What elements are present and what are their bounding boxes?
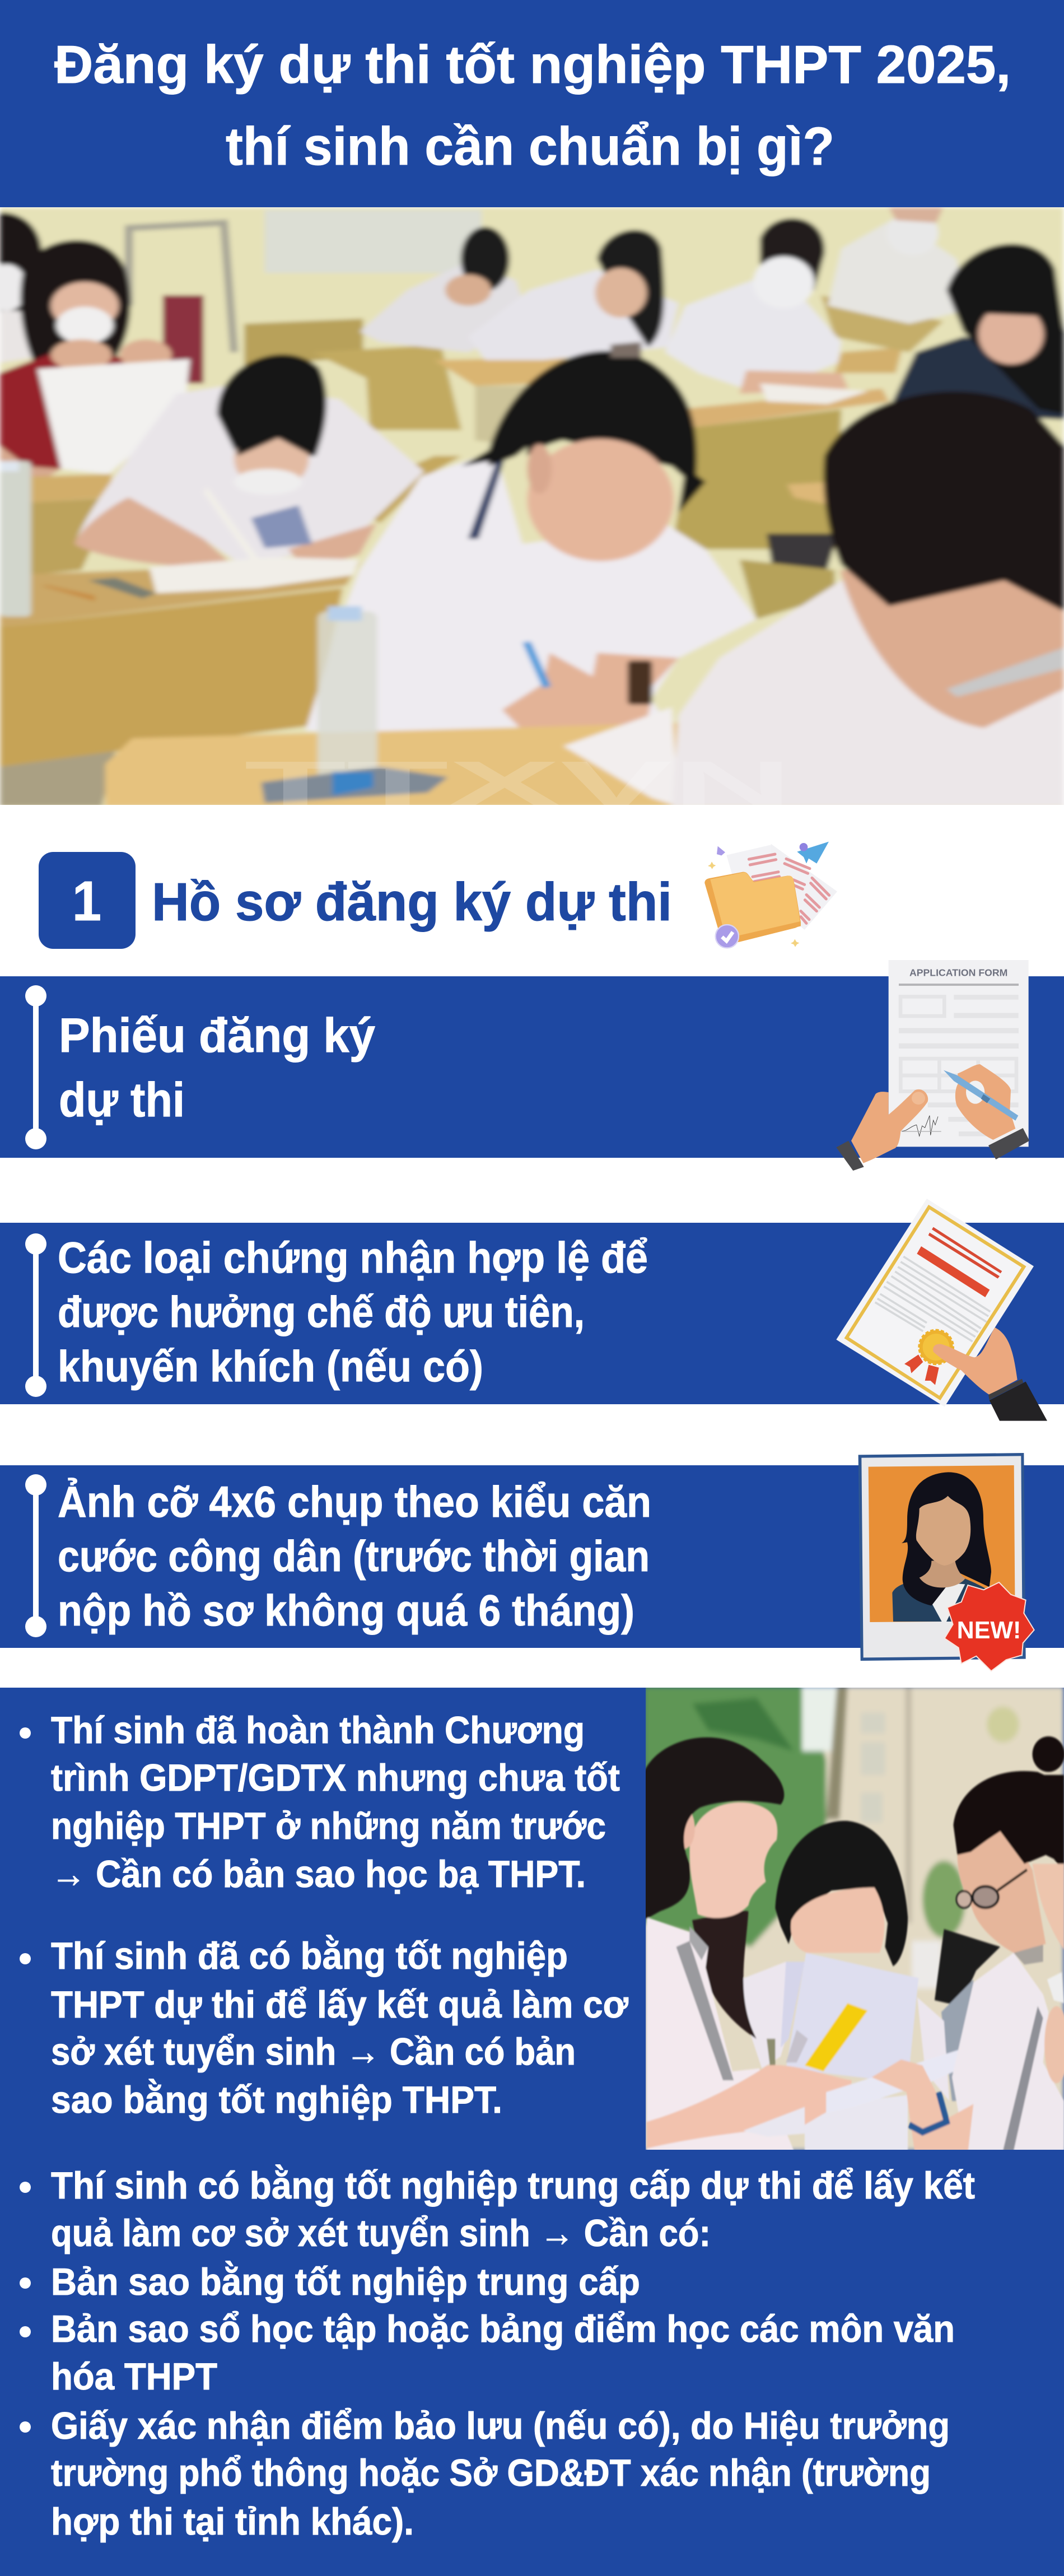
title: Đăng ký dự thi tốt nghiệp THPT 2025, — [54, 35, 1011, 95]
icon: ID portrait with new badge: NEW! — [957, 1617, 1021, 1644]
icon: ID portrait with new badge — [858, 1453, 1034, 1671]
icon: certificate in hand — [836, 1199, 1047, 1421]
bullets block two: Thí sinh đã có bằng tốt nghiệp — [51, 1934, 568, 1977]
bullets block one: → Cần có bản sao học bạ THPT. — [51, 1853, 586, 1895]
bullets block three: Thí sinh có bằng tốt nghiệp trung cấp dự thi để lấy kết — [51, 2164, 975, 2207]
panel text: Các loại chứng nhận hợp lệ để — [58, 1233, 648, 1282]
panel text: cước công dân (trước thời gian — [58, 1531, 650, 1581]
timeline marker — [25, 1474, 46, 1637]
second student — [740, 1962, 794, 2069]
bullets block two — [20, 1934, 629, 2121]
panel: application form — [0, 960, 1064, 1171]
section heading — [39, 852, 672, 949]
far left and red shirt student — [0, 212, 42, 316]
panel text — [58, 1477, 651, 1635]
bullets block three: trường phổ thông hoặc Sở GD&ĐT xác nhận (trường — [51, 2452, 931, 2494]
third student — [952, 1953, 1064, 2151]
main student — [305, 451, 757, 751]
bullets block three: hóa THPT — [51, 2355, 217, 2398]
number badge: 1 — [72, 870, 101, 933]
panel: additional documents — [0, 1686, 1064, 2576]
panel text: Phiếu đăng ký — [59, 1009, 375, 1063]
panel text: nộp hồ sơ không quá 6 tháng) — [58, 1586, 634, 1635]
panel text: dự thi — [59, 1073, 185, 1127]
bottle on desk — [318, 612, 377, 782]
panel: certificates — [0, 1199, 1064, 1421]
bullets block one: nghiệp THPT ở những năm trước — [51, 1805, 606, 1847]
bullets block two: sao bằng tốt nghiệp THPT. — [51, 2078, 502, 2121]
bullets block one: trình GDPT/GDTX nhưng chưa tốt — [51, 1757, 620, 1799]
bullets block three — [20, 2164, 975, 2543]
icon: folder with documents — [704, 842, 837, 948]
panel text: Ảnh cỡ 4x6 chụp theo kiểu căn — [58, 1477, 651, 1526]
left bottle — [0, 461, 31, 617]
front boy — [672, 580, 1064, 807]
title — [54, 35, 1011, 176]
papers — [781, 1962, 805, 2048]
photo: students reading papers — [644, 1686, 1064, 2151]
header banner — [0, 0, 1064, 207]
bullets block two: sở xét tuyển sinh → Cần có bản — [51, 2030, 576, 2073]
heading text: Hồ sơ đăng ký dự thi — [152, 872, 672, 932]
number badge — [39, 852, 136, 949]
timeline marker — [25, 1233, 46, 1397]
photo: students taking the exam — [0, 207, 1064, 818]
panel: portrait photo — [0, 1453, 1064, 1671]
bottom desk — [105, 723, 679, 807]
bullets block three: Bản sao bằng tốt nghiệp trung cấp — [51, 2260, 640, 2303]
left student white shirt — [74, 386, 424, 562]
bullets block one — [20, 1709, 620, 1895]
icon: application form with hands: APPLICATION FORM — [909, 967, 1007, 979]
bullets block three: hợp thi tại tỉnh khác). — [51, 2500, 414, 2543]
panel text — [59, 1009, 375, 1127]
timeline marker — [25, 985, 46, 1149]
panel text: được hưởng chế độ ưu tiên, — [58, 1287, 585, 1336]
title: thí sinh cần chuẩn bị gì? — [226, 117, 834, 176]
bullets block two: THPT dự thi để lấy kết quả làm cơ — [51, 1983, 629, 2026]
panel text — [58, 1233, 648, 1391]
panel text: khuyến khích (nếu có) — [58, 1341, 483, 1391]
bullets block three: Giấy xác nhận điểm bảo lưu (nếu có), do Hiệu trưởng — [51, 2405, 950, 2447]
bullets block three: quả làm cơ sở xét tuyển sinh → Cần có: — [51, 2212, 711, 2254]
icon: application form with hands — [836, 960, 1029, 1171]
first student — [692, 1911, 757, 2039]
back students — [360, 264, 529, 352]
bullets block one: Thí sinh đã hoàn thành Chương — [51, 1709, 585, 1752]
bullets block three: Bản sao sổ học tập hoặc bảng điểm học các môn văn — [51, 2308, 955, 2350]
watermark: TTXVN — [244, 748, 793, 818]
left desk — [31, 474, 112, 502]
